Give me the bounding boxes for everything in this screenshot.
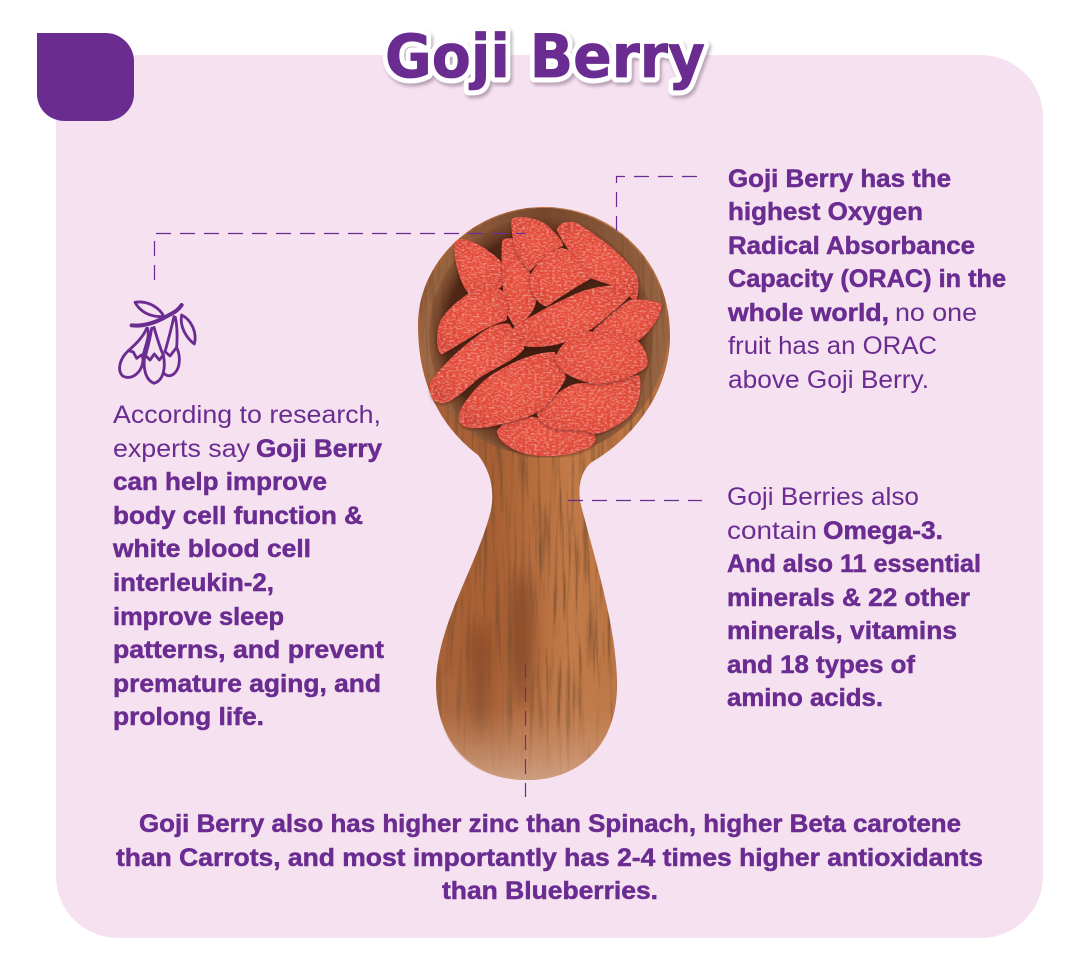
text block: top right: Goji Berry has the xyxy=(728,165,951,193)
title: Goji Berry xyxy=(385,22,705,92)
goji berries xyxy=(431,218,661,455)
text block: lower right xyxy=(727,483,981,712)
purple corner tab xyxy=(37,33,134,121)
text block: bottom: than Carrots, and most importantly has 2-4 times higher antioxidants xyxy=(116,844,983,872)
text block: left: can help improve xyxy=(113,468,327,496)
text block: lower right: contain xyxy=(727,517,817,545)
text block: left: improve sleep xyxy=(113,603,284,631)
text block: top right: fruit has an ORAC xyxy=(728,332,937,360)
text block: bottom xyxy=(116,810,983,905)
text block: lower right: and 18 types of xyxy=(727,651,916,679)
text block: left: premature aging, and xyxy=(113,670,381,698)
text block: left: patterns, and prevent xyxy=(113,636,385,664)
text block: left: interleukin-2, xyxy=(113,569,274,597)
text block: left: According to research, xyxy=(113,401,381,429)
text block: top right: above Goji Berry. xyxy=(728,366,929,394)
text block: lower right: And also 11 essential xyxy=(727,550,981,578)
text block: top right: no one xyxy=(895,299,977,327)
text block: lower right: minerals & 22 other xyxy=(727,584,970,612)
text block: left: white blood cell xyxy=(112,535,311,563)
text block: top right xyxy=(727,165,1006,394)
text block: top right: Radical Absorbance xyxy=(728,232,975,260)
text block: left: body cell function & xyxy=(113,502,363,530)
text block: lower right: minerals, vitamins xyxy=(727,617,957,645)
bowl interior xyxy=(429,217,653,453)
text block: left: experts say xyxy=(113,435,251,463)
text block: top right: highest Oxygen xyxy=(728,198,923,226)
text block: left: Goji Berry xyxy=(256,435,382,463)
connector: top right text to bowl xyxy=(616,176,697,231)
text block: lower right: Goji Berries also xyxy=(727,483,919,511)
text block: bottom: than Blueberries. xyxy=(442,877,658,905)
text block: left xyxy=(112,401,385,731)
text block: lower right: amino acids. xyxy=(727,684,883,712)
text block: top right: Capacity (ORAC) in the xyxy=(728,265,1006,293)
text block: lower right: Omega-3. xyxy=(823,517,943,545)
icon: goji berry branch xyxy=(120,302,195,383)
text block: bottom: Goji Berry also has higher zinc than Spinach, higher Beta carotene xyxy=(139,810,961,838)
text block: left: prolong life. xyxy=(113,703,264,731)
title: Goji Berry xyxy=(385,22,705,92)
connector: right text to handle xyxy=(568,500,702,502)
connector: bottom text to handle xyxy=(524,663,526,797)
spoon body xyxy=(418,207,670,780)
text block: top right: whole world, xyxy=(727,299,889,327)
connector: icon to bowl xyxy=(154,234,526,280)
image: wooden spoon with goji berries xyxy=(418,207,670,780)
